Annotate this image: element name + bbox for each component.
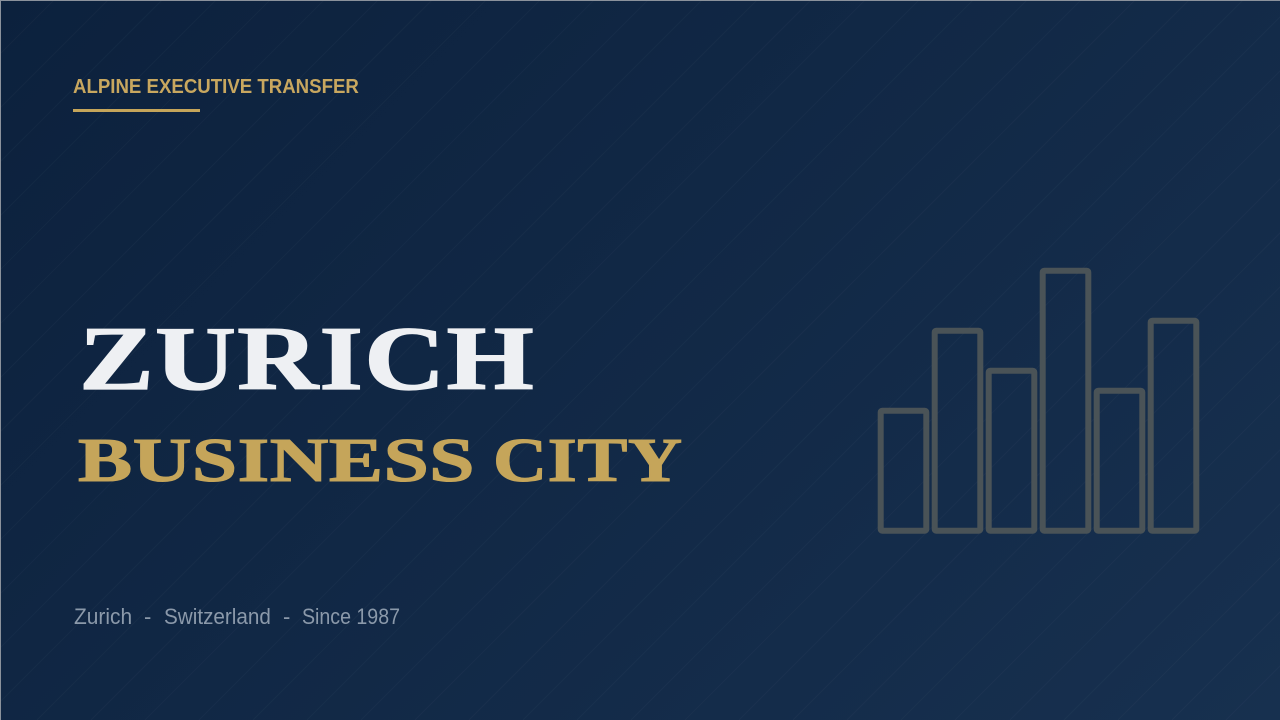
title: Zurich: ZURICH (79, 308, 535, 409)
icon: skyline bar outlines (878, 268, 1200, 534)
eyebrow: company name: ALPINE EXECUTIVE TRANSFER (73, 76, 359, 98)
subtitle: Business City: BUSINESS (78, 427, 475, 495)
location and founding line: Switzerland (164, 604, 271, 629)
gold accent rule (73, 109, 200, 112)
location and founding line: Since 1987 (302, 604, 400, 629)
location and founding line (74, 604, 400, 629)
subtitle: Business City: CITY (493, 427, 683, 495)
location and founding line: Zurich (74, 604, 132, 629)
location and founding line: - (144, 604, 151, 629)
location and founding line: - (283, 604, 290, 629)
subtitle: Business City (78, 427, 683, 495)
